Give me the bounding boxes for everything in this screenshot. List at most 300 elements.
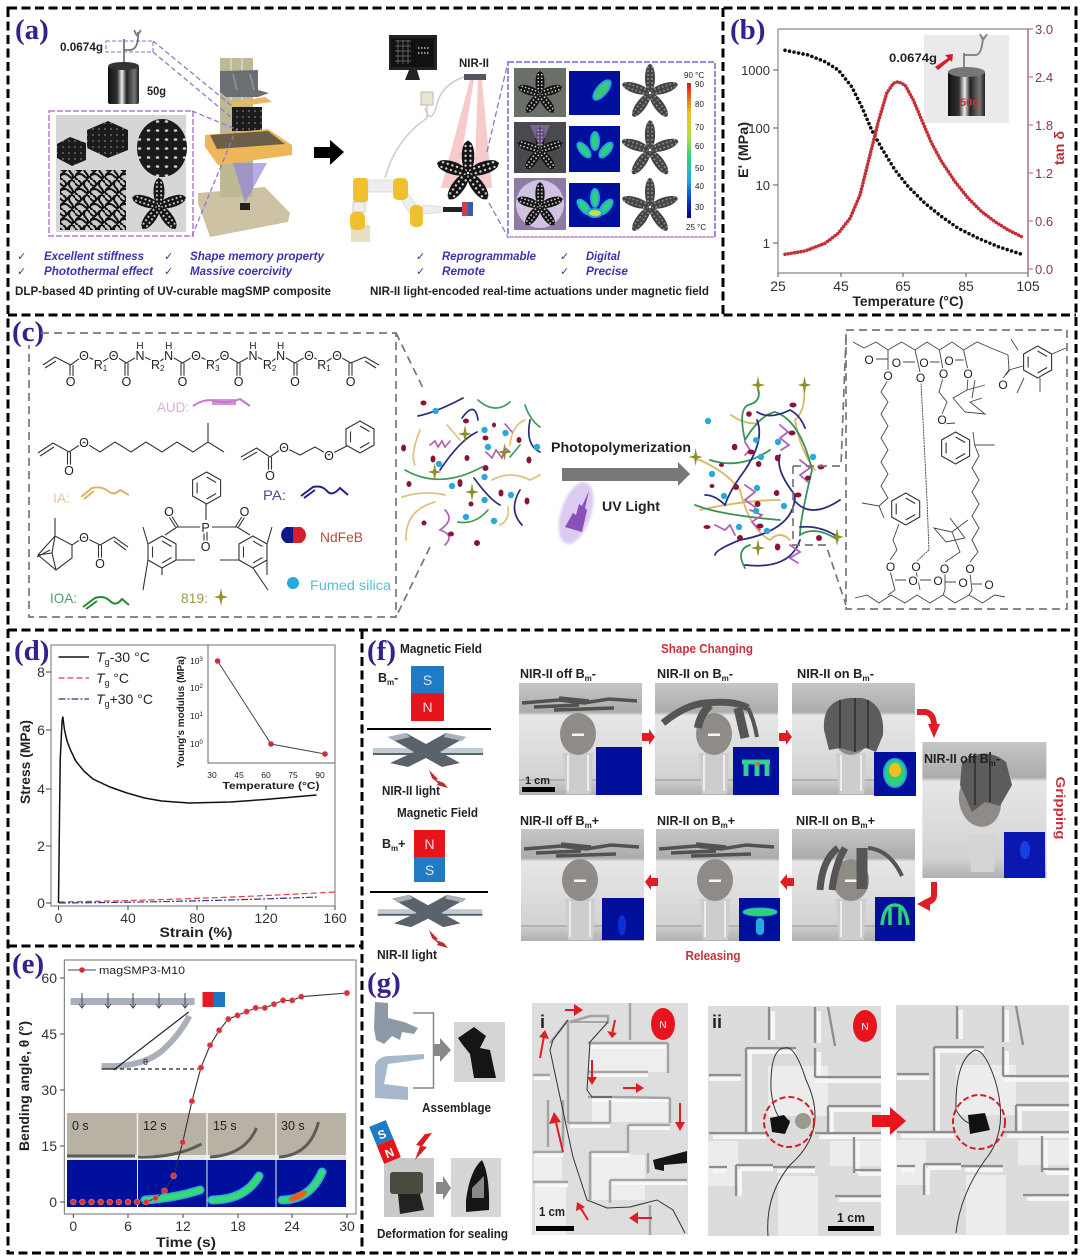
photo strip: beam photos	[67, 1113, 346, 1207]
legend: T	[96, 670, 106, 686]
molecule: AUD: H	[277, 341, 284, 352]
photo strip: beam photos: 12 s	[143, 1119, 167, 1133]
molecule: AUD: O	[66, 375, 76, 389]
schematic: Bm- magnet and gripper: -	[394, 671, 398, 685]
legend: IOA: IOA:	[50, 590, 77, 606]
inset chart: Young's modulus: 2	[199, 684, 203, 690]
schematic: deformation for sealing: S	[376, 1127, 388, 1143]
dashed box: network chemistry: O	[883, 369, 893, 383]
molecule: PA	[241, 421, 374, 483]
icon: 0.0674 g hook holding 50 g weight: 50g	[147, 84, 166, 98]
chart: storage modulus and tan delta: 105	[1016, 278, 1040, 294]
colour bar: temperature scale: 25 °C	[686, 223, 706, 232]
legend: g	[105, 678, 110, 688]
feature list: actuation	[416, 249, 628, 278]
arrow: photopolymerization	[562, 462, 690, 486]
label: photopolymerization: Photopolymerization	[551, 439, 691, 455]
molecule: AUD: 1	[103, 364, 108, 373]
schematic: Bm- magnet and gripper: B	[378, 671, 387, 685]
schematic: Bm+ magnet and gripper	[370, 806, 488, 962]
photo: NIR-II on Bm- closed	[792, 667, 916, 796]
label (d): (d)	[14, 635, 49, 667]
photo i: maze path: N	[659, 1020, 667, 1031]
photo i: maze path	[532, 1003, 688, 1235]
dashed box: network chemistry: O	[984, 578, 994, 592]
schematic: Bm+ magnet and gripper: N	[424, 836, 435, 852]
molecule: AUD: O	[290, 375, 300, 389]
chart: storage modulus and tan delta: 0.0	[1035, 262, 1053, 277]
chart: storage modulus and tan delta: 2.4	[1035, 70, 1053, 85]
dashed box: network chemistry: O	[939, 367, 948, 381]
schematic: Bm+ magnet and gripper: m	[391, 844, 398, 853]
colour bar: temperature scale: 40	[695, 182, 704, 191]
label: UV light: UV Light	[602, 498, 660, 514]
axis title: bending angle: Bending angle, θ (°)	[16, 1021, 32, 1151]
legend: fumed silica: Fumed silica	[310, 577, 391, 593]
inset chart: Young's modulus	[176, 645, 335, 792]
feature list: actuation: ✓	[560, 251, 569, 263]
chart: bending angle over time: 30	[41, 1082, 57, 1098]
molecule: AUD: N	[248, 349, 258, 363]
connector lines to actuation photos	[487, 62, 508, 237]
molecule: IA	[38, 423, 224, 478]
arrow: back step 2	[645, 874, 658, 890]
chart: bending angle over time: 45	[41, 1026, 57, 1042]
icon: lattice star under laser	[435, 141, 501, 203]
panel: (d) tensile chart	[8, 630, 362, 946]
molecule: AUD: O	[122, 375, 132, 389]
feature list: actuation: ✓	[416, 251, 425, 263]
legend	[68, 965, 185, 977]
feature list: material: ✓	[17, 266, 26, 278]
photo: NIR-II on Bm+ flat: NIR-II on B	[657, 814, 721, 828]
inset chart: Young's modulus: 75	[288, 770, 298, 780]
heading: shape changing: Shape Changing	[661, 641, 753, 656]
dashed box: network chemistry: O	[908, 574, 918, 588]
label (e): (e)	[12, 948, 44, 980]
photo: NIR-II off Bm-: -	[592, 667, 596, 681]
photo ii: before sealing: N	[861, 1022, 869, 1033]
arrow: step 1	[642, 729, 655, 745]
schematic: Bm- magnet and gripper: Magnetic Field	[400, 642, 482, 656]
schematic: Bm+ magnet and gripper: +	[398, 837, 405, 851]
chart: storage modulus and tan delta: 0.6	[1035, 214, 1053, 229]
molecule: AUD: O	[79, 349, 89, 363]
series: storage modulus	[785, 50, 1022, 254]
caption: printing: DLP-based 4D printing of UV-curable magSMP composite	[15, 284, 331, 298]
inset chart: Young's modulus: 10	[190, 739, 199, 749]
chart: stress-strain: 160	[323, 910, 347, 926]
label (b): (b)	[730, 14, 765, 46]
molecule: AUD: H	[249, 341, 257, 352]
illustration: DLP printer	[198, 58, 292, 237]
legend: 819: 819:	[181, 590, 208, 606]
arrowhead: to gripping	[928, 724, 940, 738]
molecule: IOA: O	[79, 531, 89, 545]
schematic: beam and magnet: θ	[143, 1057, 148, 1067]
photo strip: beam photos: 0 s	[72, 1119, 89, 1133]
inset chart: Young's modulus: Temperature (°C)	[222, 781, 320, 792]
icon: 0.0674 g hook holding 50 g weight: 0.0674g	[60, 40, 103, 54]
photo: NIR-II off Bm-: 1 cm	[525, 775, 550, 787]
photo: NIR-II on Bm+: NIR-II on B	[796, 814, 860, 828]
axis title: strain: Strain (%)	[160, 924, 232, 940]
molecule: 819 photoinitiator	[143, 472, 272, 590]
photo: NIR-II off Bm+: +	[592, 814, 599, 828]
legend: -30 °C	[110, 649, 150, 665]
inset: weight photo: 50g	[960, 97, 979, 109]
series: bending angle	[70, 990, 350, 1205]
dashed box: network chemistry: O	[963, 367, 973, 381]
photo: NIR-II on Bm- closed: NIR-II on B	[797, 667, 861, 681]
molecule: AUD: R	[263, 358, 272, 372]
photo: NIR-II off Bm-	[519, 667, 642, 795]
photo iii: after sealing	[896, 1005, 1069, 1235]
chart: bending angle over time: 15	[41, 1138, 57, 1154]
colour bar: temperature scale: 90	[695, 80, 704, 89]
legend: +30 °C	[110, 691, 153, 707]
schematic: Bm- magnet and gripper: NIR-II light	[382, 784, 441, 798]
feature list: material	[17, 249, 325, 278]
chart: stress-strain: 8	[37, 664, 45, 680]
panel: (e) bending chart	[8, 946, 362, 1253]
photo strip: beam photos: 30 s	[281, 1119, 305, 1133]
chart: storage modulus and tan delta: 85	[958, 278, 974, 294]
connector lines to printer	[153, 41, 238, 236]
chart: stress-strain: 40	[120, 910, 136, 926]
label (c): (c)	[12, 316, 44, 348]
legend: PA: PA:	[263, 487, 286, 503]
dashed box: network chemistry: O	[911, 560, 921, 574]
series: tan delta	[785, 82, 1022, 254]
chart: stress-strain: 0	[55, 910, 63, 926]
chart: stress-strain: 80	[189, 910, 205, 926]
feature list: material: Massive coercivity	[190, 264, 293, 278]
arrow: process to actuation	[314, 140, 344, 165]
illustration: uncured monomer mixture	[401, 398, 540, 546]
colour bar: temperature scale: 80	[695, 100, 704, 109]
arrow: before to after	[872, 1107, 906, 1135]
photo: NIR-II off Bm+: m	[585, 821, 592, 830]
icon: 0.0674 g hook holding 50 g weight	[60, 30, 166, 104]
inset: weight photo: 0.0674g	[889, 51, 937, 65]
photo: NIR-II on Bm- closed: m	[862, 674, 870, 683]
legend: g	[105, 699, 110, 709]
molecule: AUD: 1	[326, 364, 331, 373]
inset chart: Young's modulus: 60	[261, 770, 271, 780]
chart: bending angle over time: 6	[124, 1218, 132, 1234]
arrow: step 2	[779, 729, 792, 745]
legend: T	[96, 649, 106, 665]
series: Tg	[59, 892, 335, 902]
label (g): (g)	[367, 967, 401, 999]
chart: storage modulus and tan delta: 1000	[741, 63, 770, 78]
molecule: 819 photoinitiator: O	[164, 505, 174, 519]
legend: AUD: AUD:	[157, 399, 189, 415]
feature list: actuation: Reprogrammable	[442, 249, 536, 263]
molecule: AUD: R	[206, 358, 215, 372]
schematic: deformation for sealing: N	[383, 1145, 396, 1161]
molecule: AUD: H	[136, 341, 144, 352]
dashed box: network chemistry: O	[937, 413, 947, 427]
chart: storage modulus and tan delta: 1.2	[1035, 166, 1053, 181]
dashed box: network chemistry: O	[944, 354, 954, 368]
chart: stress-strain: 4	[37, 781, 45, 797]
feature list: material: Photothermal effect	[44, 264, 154, 278]
series: Tg+30	[59, 897, 318, 903]
photo: NIR-II on Bm+ flat: m	[721, 821, 728, 830]
molecule: IOA	[37, 518, 128, 571]
molecule: IA: O	[64, 464, 74, 478]
arrow: to release	[924, 882, 934, 903]
schematic: Bm+ magnet and gripper: B	[382, 837, 391, 851]
chart: storage modulus and tan delta: 65	[895, 278, 911, 294]
axis title: tan delta: tan δ	[1051, 131, 1067, 165]
photo inset: printed samples	[49, 111, 193, 236]
inset chart: Young's modulus: 10	[190, 656, 199, 666]
photo: NIR-II on Bm- bending: m	[722, 674, 729, 683]
photo: NIR-II on Bm+: m	[860, 821, 868, 830]
colour bar: temperature scale: 60	[695, 142, 704, 151]
inset chart: Young's modulus: 30	[207, 770, 217, 780]
photo ii: before sealing: 1 cm	[837, 1210, 865, 1225]
photo: NIR-II on Bm+	[792, 814, 915, 941]
legend: magSMP3-M10	[99, 965, 185, 977]
photo: NIR-II off Bm+	[520, 814, 644, 941]
inset chart: Young's modulus: 90	[315, 770, 325, 780]
chart: bending angle over time: 30	[339, 1218, 355, 1234]
molecule: 819 photoinitiator: O	[240, 505, 250, 519]
chart: stress-strain: 2	[37, 838, 45, 854]
molecule: AUD: N	[276, 349, 285, 363]
panel: (c) chemistry and photopolymerization	[8, 315, 1076, 630]
feature list: actuation: Precise	[586, 264, 628, 278]
label (f): (f)	[367, 635, 396, 667]
chart: storage modulus and tan delta: 1.8	[1035, 118, 1053, 133]
schematic: Bm- magnet and gripper: S	[423, 672, 432, 688]
chart: storage modulus and tan delta: 25	[770, 278, 786, 294]
photo grid: selective actuation	[508, 62, 715, 237]
icon: UV light bolt	[552, 478, 600, 548]
illustration: NIR-II laser and cable: NIR-II	[459, 56, 489, 70]
molecule: AUD: R	[151, 358, 160, 372]
axis title: temperature: Temperature (°C)	[852, 293, 964, 309]
illustration: crosslinked network	[689, 376, 844, 568]
colour bar: temperature scale: 50	[695, 164, 704, 173]
feature list: actuation: ✓	[560, 266, 569, 278]
chart: bending angle over time: 0	[69, 1218, 77, 1234]
panel: (b) DMA chart	[723, 8, 1076, 315]
molecule: AUD: R	[317, 358, 326, 372]
dashed box: network chemistry: O	[933, 574, 943, 588]
molecule: AUD: 3	[215, 364, 220, 373]
arrow: back step 1	[780, 874, 794, 890]
photo: NIR-II on Bm- closed: -	[870, 667, 874, 681]
photo: NIR-II on Bm- bending: NIR-II on B	[657, 667, 721, 681]
dashed box: network chemistry: O	[864, 353, 874, 367]
schematic: Bm+ magnet and gripper: Magnetic Field	[397, 806, 478, 820]
colour bar: temperature scale: 90 °C	[684, 71, 704, 80]
chart: stress-strain: 6	[37, 722, 45, 738]
caption: actuation: NIR-II light-encoded real-time actuations under magnetic field	[370, 284, 709, 298]
chart: storage modulus and tan delta: 3.0	[1035, 22, 1053, 37]
schematic: deformation for sealing	[369, 1120, 508, 1241]
schematic: assemblage	[374, 1002, 505, 1115]
feature list: material: Shape memory property	[190, 249, 325, 263]
photo: NIR-II off Bm-: m	[585, 674, 592, 683]
photo: NIR-II off Bm+: NIR-II off B	[520, 814, 585, 828]
dashed box: network chemistry: O	[886, 560, 895, 574]
chart: stress-strain	[17, 645, 347, 940]
molecule: AUD: O	[234, 375, 244, 389]
molecule: AUD: O	[109, 349, 119, 363]
legend: °C	[110, 670, 129, 686]
photo: NIR-II off gripping: NIR-II off B	[924, 752, 989, 766]
chart: bending angle over time	[16, 960, 356, 1250]
molecule: AUD: O	[332, 349, 342, 363]
dashed box: network chemistry: O	[916, 371, 925, 385]
molecule: AUD: H	[165, 341, 172, 352]
axis title: time: Time (s)	[156, 1234, 216, 1250]
photo: NIR-II off gripping: m	[989, 759, 996, 768]
molecule: IOA: O	[95, 557, 105, 571]
chart: storage modulus and tan delta: 100	[748, 121, 770, 136]
axis title: stress: Stress (MPa)	[17, 720, 33, 804]
thermal strip: beam thermal images	[67, 1160, 346, 1207]
molecule: PA: O	[324, 449, 334, 463]
molecule: 819 photoinitiator: P	[201, 521, 210, 535]
chart: storage modulus and tan delta: 10	[756, 178, 770, 193]
molecule: AUD: N	[135, 349, 145, 363]
colour bar: temperature scale	[684, 71, 706, 232]
legend: AUD	[157, 399, 250, 415]
molecule: PA: O	[279, 441, 289, 455]
colour bar: temperature scale: 70	[695, 123, 704, 132]
chart: bending angle over time: 24	[284, 1218, 300, 1234]
photo ii: before sealing	[708, 1006, 881, 1236]
schematic: Bm+ magnet and gripper: NIR-II light	[377, 948, 438, 962]
chart: storage modulus and tan delta	[735, 22, 1067, 309]
chart: stress-strain: 0	[37, 895, 45, 911]
chart: storage modulus and tan delta: 1	[763, 236, 770, 251]
photo i: maze path: 1 cm	[539, 1204, 565, 1219]
molecule: AUD: 2	[160, 364, 165, 373]
photo: NIR-II on Bm- bending: -	[729, 667, 733, 681]
label: gripping: Gripping	[1053, 777, 1068, 840]
panel: (g) assembled robot in maze	[362, 960, 1076, 1253]
legend: IOA	[50, 590, 129, 609]
inset chart: Young's modulus: 10	[190, 683, 199, 693]
photo: NIR-II on Bm+ flat	[656, 814, 780, 941]
photo: NIR-II on Bm+ flat: +	[728, 814, 735, 828]
inset chart: Young's modulus: 10	[190, 711, 199, 721]
photo: NIR-II on Bm+: +	[868, 814, 875, 828]
feature list: actuation: Remote	[442, 264, 485, 278]
inset: weight photo	[889, 34, 1009, 123]
arrowhead: to release	[917, 897, 930, 911]
dashed box: network chemistry: O	[940, 562, 949, 576]
schematic: deformation for sealing: Deformation for sealing	[377, 1227, 508, 1241]
molecule: 819 photoinitiator: O	[201, 540, 211, 554]
illustration: robotic arm with magnet	[350, 178, 473, 242]
photo i: maze path: i	[540, 1012, 545, 1032]
feature list: material: ✓	[164, 251, 173, 263]
legend: PA	[263, 486, 348, 503]
inset chart: Young's modulus: Young's modulus (MPa)	[176, 656, 187, 768]
legend: g	[105, 657, 110, 667]
illustration: NIR-II laser and cable	[385, 56, 492, 188]
schematic: beam and magnet	[71, 992, 225, 1070]
panel: (f) gripping sequence	[362, 630, 1076, 963]
molecule: AUD: R	[94, 358, 103, 372]
schematic: Bm+ magnet and gripper: S	[425, 862, 434, 878]
feature list: material: ✓	[17, 251, 26, 263]
inset chart: Young's modulus: 0	[199, 740, 203, 746]
photo: NIR-II off gripping: -	[996, 752, 1000, 766]
molecule: AUD: O	[191, 349, 201, 363]
molecule: AUD	[43, 341, 379, 389]
molecule: PA: O	[265, 469, 275, 483]
photo: NIR-II off Bm-: NIR-II off B	[520, 667, 585, 681]
dashed box: network chemistry: O	[965, 562, 975, 576]
molecule: AUD: N	[164, 349, 173, 363]
schematic: Bm- magnet and gripper: N	[422, 699, 433, 715]
series: Tg-30	[58, 717, 316, 903]
molecule: AUD: 2	[272, 364, 277, 373]
legend: IA: IA:	[53, 490, 70, 506]
schematic: assemblage: Assemblage	[422, 1101, 491, 1115]
axis title: E': E' (MPa)	[735, 122, 751, 178]
panel: (a) DLP 4D printing and NIR-II actuation	[8, 8, 723, 315]
icon: computer monitor	[389, 35, 437, 80]
dashed box: monomers	[29, 333, 430, 617]
molecule: IA: O	[79, 436, 89, 450]
legend: 819	[181, 588, 228, 606]
chart: storage modulus and tan delta: 45	[833, 278, 849, 294]
photo strip: beam photos: 15 s	[213, 1119, 237, 1133]
molecule: AUD: O	[220, 349, 230, 363]
inset chart: Young's modulus: 1	[199, 712, 203, 718]
molecule: AUD: O	[304, 349, 314, 363]
photo: NIR-II off gripping	[922, 742, 1046, 878]
schematic: Bm- magnet and gripper	[367, 642, 491, 798]
dashed box: network chemistry: O	[958, 576, 968, 590]
dashed box: network chemistry: O	[892, 356, 901, 370]
inset chart: Young's modulus: 45	[234, 770, 244, 780]
photo ii: before sealing: ii	[712, 1012, 722, 1032]
chart: stress-strain: 120	[254, 910, 278, 926]
schematic: Bm- magnet and gripper: m	[387, 678, 394, 687]
colour bar: temperature scale: 30	[695, 203, 704, 212]
chart: bending angle over time: 12	[175, 1218, 191, 1234]
legend: NdFeB	[281, 527, 363, 545]
feature list: actuation: Digital	[586, 249, 621, 263]
dashed box: network chemistry: O	[919, 356, 929, 370]
arrow: to gripping	[917, 712, 934, 726]
legend	[58, 649, 153, 709]
legend: NdFeB: NdFeB	[320, 529, 363, 545]
molecule: AUD: O	[346, 375, 356, 389]
dashed box: network chemistry	[793, 330, 1067, 609]
chart: bending angle over time: 60	[41, 970, 57, 986]
feature list: actuation: ✓	[416, 266, 425, 278]
feature list: material: ✓	[164, 266, 173, 278]
chart: bending angle over time: 18	[230, 1218, 246, 1234]
label (a): (a)	[15, 14, 49, 46]
photo: NIR-II on Bm- bending	[655, 667, 779, 795]
heading: releasing: Releasing	[686, 948, 741, 963]
dashed box: network chemistry: O	[998, 378, 1008, 392]
